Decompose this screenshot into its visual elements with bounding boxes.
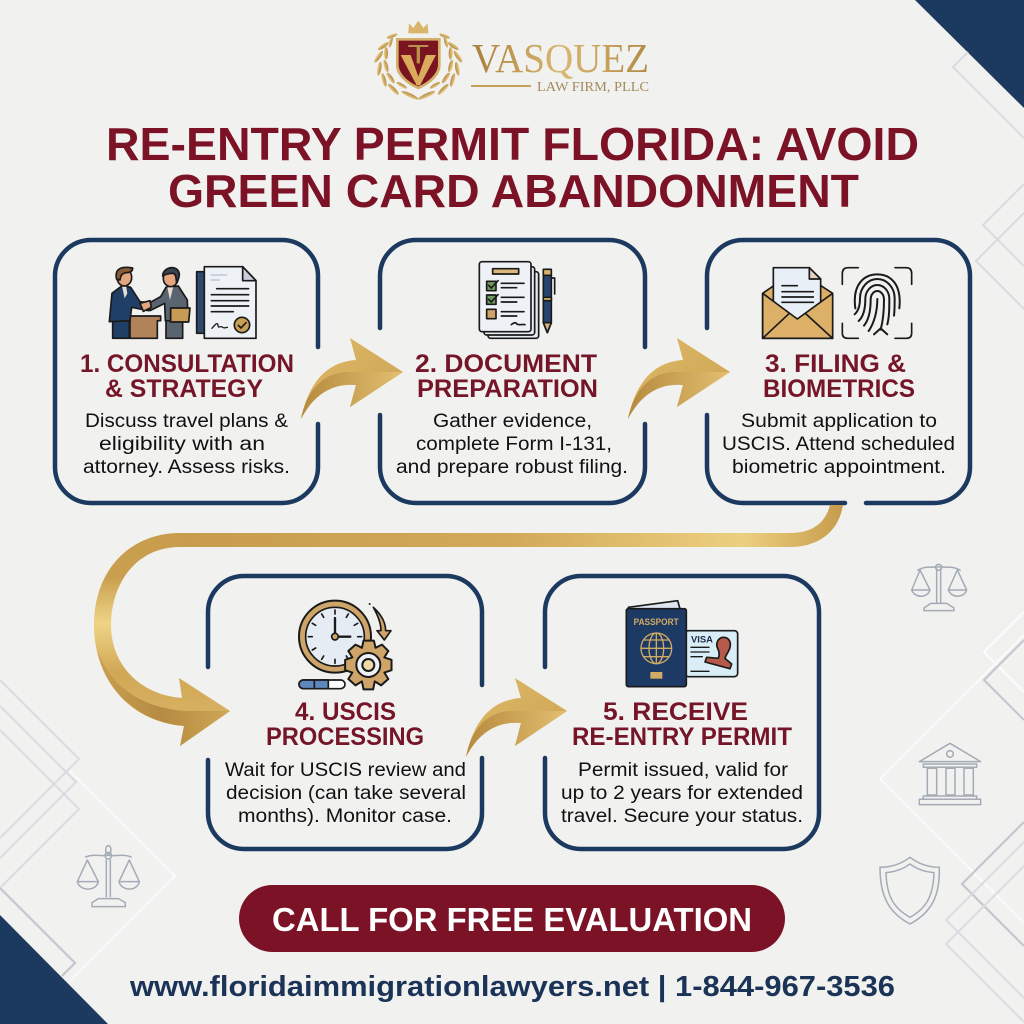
icon: envelope and fingerprint — [763, 268, 912, 338]
step 5 heading: RE-ENTRY PERMIT — [572, 723, 792, 751]
step 5 heading: 5. RECEIVE — [603, 698, 748, 726]
step 4 text — [225, 760, 466, 827]
logo rule — [471, 85, 531, 87]
card border 2 — [380, 240, 645, 503]
step 4 heading: PROCESSING — [266, 723, 424, 751]
step 2 text — [396, 411, 628, 478]
logo — [373, 21, 649, 101]
step 2 heading — [415, 350, 598, 403]
arrow: long connector step 3 to 4 — [94, 505, 843, 746]
step 5 heading — [572, 698, 792, 751]
logo subtitle: LAW FIRM, PLLC — [537, 80, 649, 95]
call to action button — [239, 885, 785, 952]
step 2 heading: PREPARATION — [417, 375, 598, 403]
background icon: courthouse — [919, 743, 981, 805]
panel: step 1 consultation — [55, 240, 318, 503]
step 3 heading: BIOMETRICS — [763, 375, 915, 403]
logo name: VASQUEZ — [472, 35, 649, 81]
step 2 text: Gather evidence, — [433, 411, 592, 432]
step 4 text: decision (can take several — [226, 783, 466, 804]
card border 1 — [55, 240, 318, 503]
step 4 heading: 4. USCIS — [295, 698, 396, 726]
step 4 text: Wait for USCIS review and — [225, 760, 466, 781]
title: RE-ENTRY PERMIT FLORIDA: AVOID — [106, 118, 919, 170]
card border 4 — [208, 576, 482, 849]
call to action button: CALL FOR FREE EVALUATION — [272, 901, 752, 938]
card border 5 — [545, 576, 819, 849]
step 5 text: travel. Secure your status. — [561, 806, 803, 827]
step 4 text: months). Monitor case. — [238, 806, 452, 827]
step 1 text: attorney. Assess risks. — [83, 457, 290, 478]
icon: handshake and contract — [109, 267, 256, 338]
step 2 heading: 2. DOCUMENT — [415, 350, 597, 378]
corner triangle top right — [915, 0, 1024, 108]
step 5 text — [561, 760, 803, 827]
contact line: www.floridaimmigrationlawyers.net | 1-844-967-3536 — [129, 971, 895, 1003]
corner triangle bottom left — [0, 915, 108, 1024]
step 3 text: USCIS. Attend scheduled — [722, 434, 955, 455]
panel: step 2 document preparation — [380, 240, 645, 503]
background icon: scales left — [77, 846, 139, 907]
icon: passport and visa: VISA — [691, 635, 714, 645]
panel: step 4 uscis processing — [208, 576, 482, 849]
step 5 text: Permit issued, valid for — [578, 760, 789, 781]
background icon: scales right — [912, 564, 967, 611]
arrow: step 4 to 5 — [466, 678, 567, 757]
step 3 text: Submit application to — [741, 411, 937, 432]
panel: step 3 filing and biometrics — [707, 240, 970, 503]
logo crest — [373, 21, 464, 101]
icon: clock and gear — [299, 601, 392, 689]
icon: passport and visa: PASSPORT — [634, 617, 679, 627]
step 1 heading — [80, 350, 294, 403]
arrow: step 1 to 2 — [301, 338, 403, 419]
step 3 heading: 3. FILING & — [765, 350, 906, 378]
background icon: shield — [880, 857, 939, 924]
title — [106, 118, 919, 217]
step 4 heading — [266, 698, 424, 751]
step 1 heading: & STRATEGY — [105, 375, 263, 403]
panel: step 5 receive permit — [545, 576, 819, 849]
step 1 text — [83, 411, 290, 478]
card border 3 — [707, 240, 970, 503]
step 3 text — [722, 411, 955, 478]
icon: checklist and pen — [479, 262, 555, 338]
step 1 heading: 1. CONSULTATION — [80, 350, 294, 378]
step 2 text: complete Form I-131, — [416, 434, 612, 455]
step 2 text: and prepare robust filing. — [396, 457, 628, 478]
step 3 heading — [763, 350, 915, 403]
step 3 text: biometric appointment. — [732, 457, 946, 478]
icon: passport and visa — [626, 601, 738, 687]
step 1 text: eligibility with an — [99, 434, 265, 455]
arrow: step 2 to 3 — [628, 338, 730, 419]
title: GREEN CARD ABANDONMENT — [168, 165, 859, 217]
step 1 text: Discuss travel plans & — [85, 411, 288, 432]
step 5 text: up to 2 years for extended — [561, 783, 803, 804]
